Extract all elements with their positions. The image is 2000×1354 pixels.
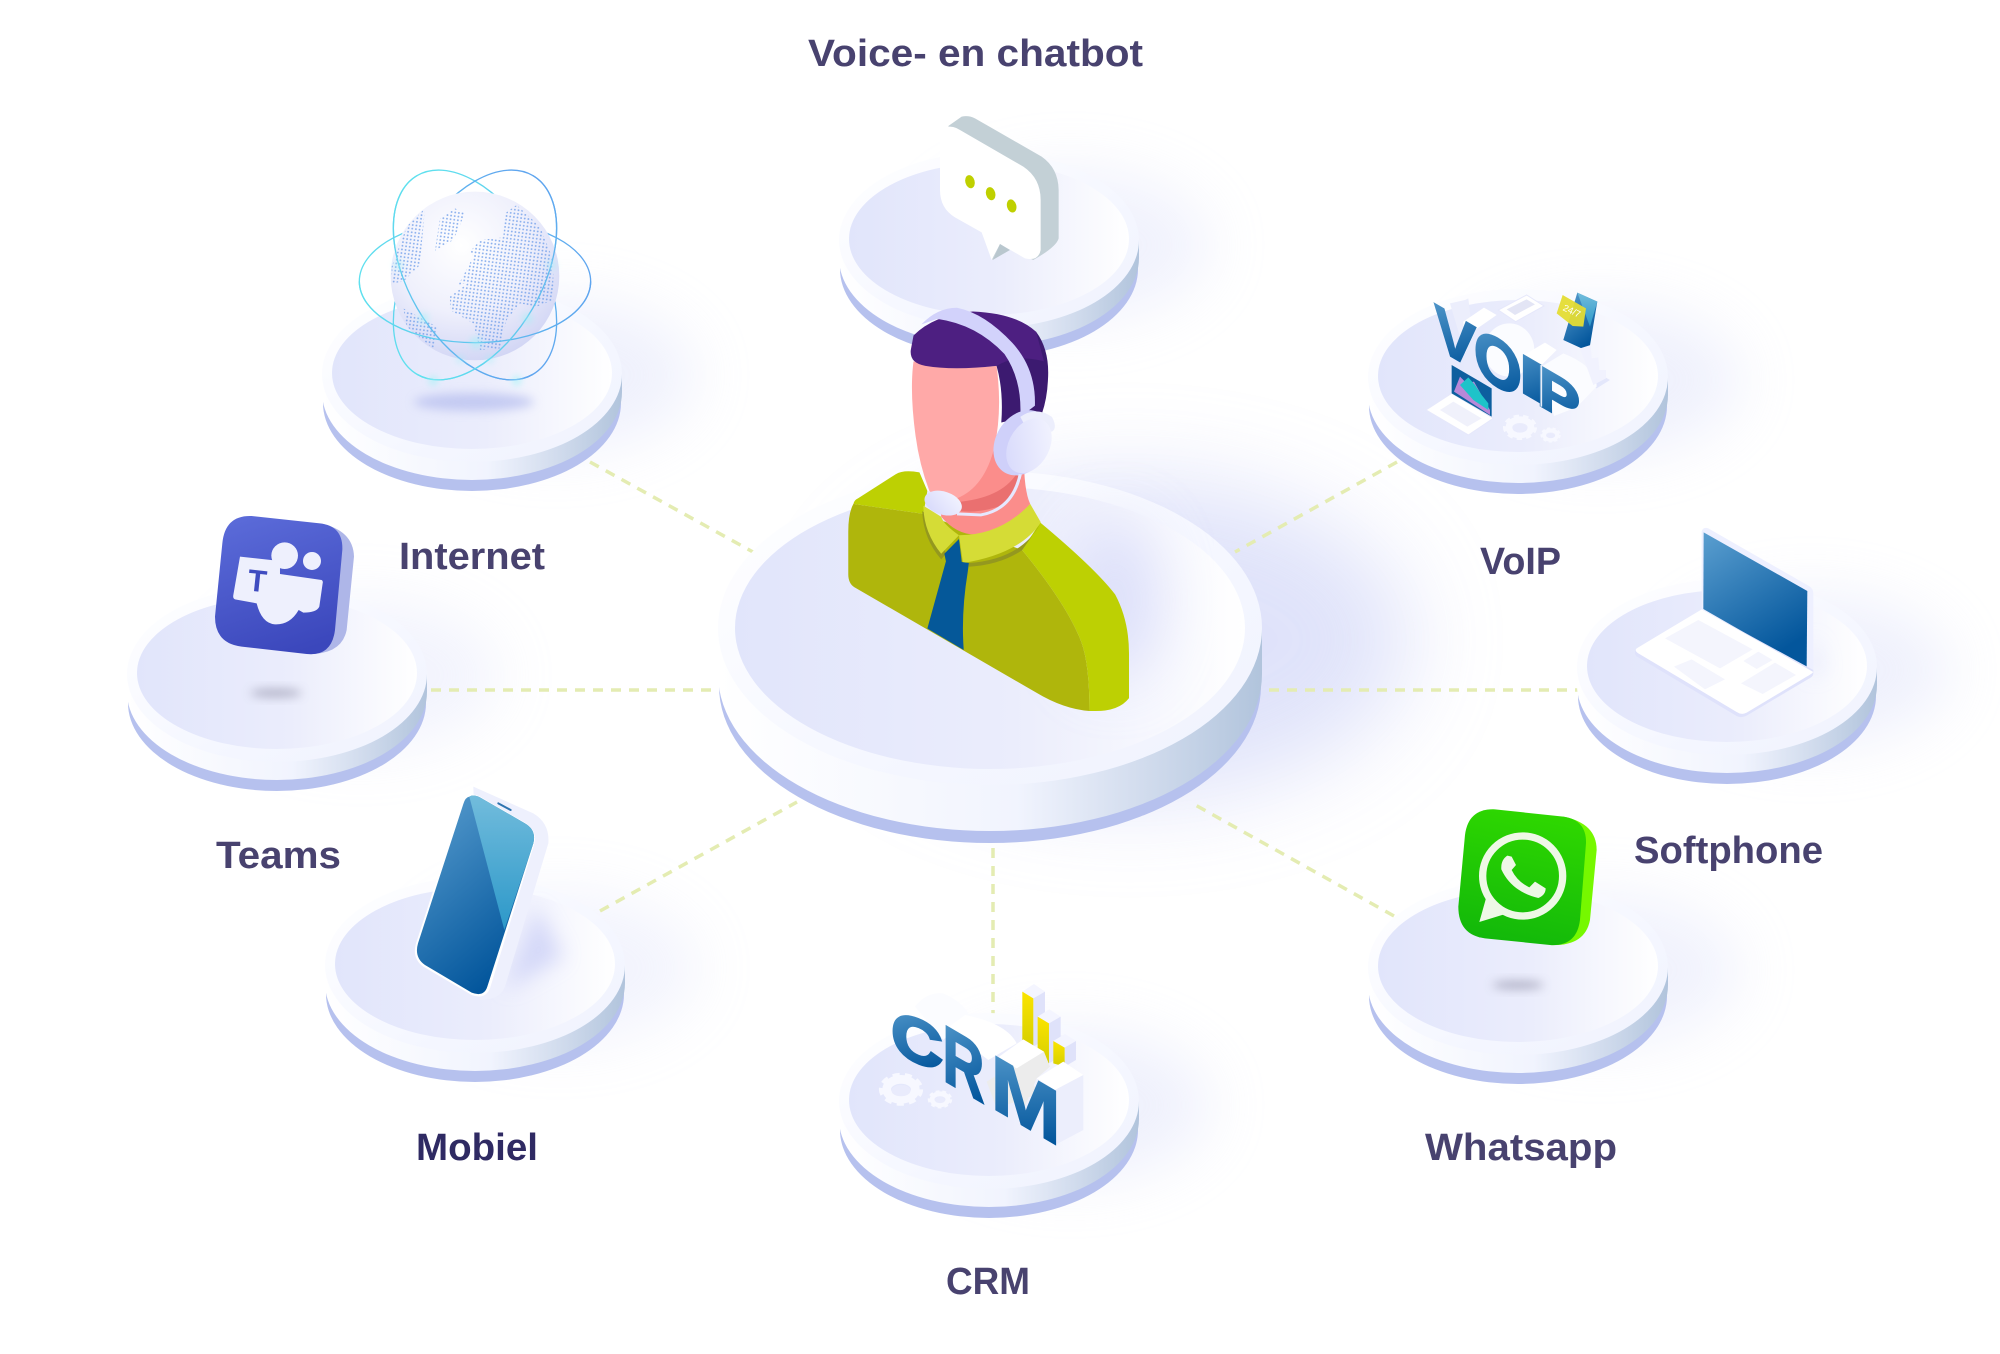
platform [325,877,625,1082]
platform [322,286,622,491]
shadow under globe [414,393,534,411]
shirt [848,471,1129,711]
label: Teams [216,835,341,877]
panel: Internet [322,142,622,578]
icon: Teams [215,516,354,654]
label: Mobiel [416,1127,538,1169]
tie [927,539,969,650]
letters: C [891,996,943,1085]
panel: VoIP [1368,289,1668,583]
icon: Whatsapp [1458,809,1597,945]
icon: VoIP scene [1426,289,1610,442]
chin shadow [957,474,1021,512]
icon: Teams: T [246,564,269,599]
shirt collar [922,504,1041,567]
panel: Softphone [1577,528,1877,872]
panel: Voice- en chatbot [808,33,1143,357]
dashed connectors [431,462,1578,1015]
label: CRM [946,1261,1030,1303]
laptop [1426,393,1493,435]
label: VoIP [1480,541,1561,583]
white extrusion backs [915,993,968,1040]
platform [1577,579,1877,784]
microphone [921,486,966,520]
white extrusion backs [1450,298,1472,353]
letters: V [1434,289,1477,385]
icon: chat bubble [940,116,1059,260]
panel: Mobiel [325,787,625,1169]
phone and 24/7 note [1563,293,1597,349]
icon: CRM scene: R [943,1007,984,1121]
panel: CRM [839,984,1139,1303]
label: Internet [399,536,545,578]
label: Whatsapp [1425,1127,1617,1169]
icon: CRM scene [881,984,1083,1164]
neck [937,435,1030,535]
microphone arm [957,474,1020,515]
panel: Teams [127,516,427,877]
icon: smartphone [415,787,563,1000]
central agent figure with headset [848,308,1129,711]
icon: VoIP scene: O [1474,311,1522,415]
icon: VoIP scene: I [1516,338,1549,421]
platform [1368,879,1668,1084]
shadow under Whatsapp icon [1492,981,1544,989]
icon: VoIP scene: 24/7 [1561,303,1582,319]
earpiece [983,401,1062,484]
platform [839,152,1139,357]
icon: globe with orbits [359,142,591,408]
face [912,361,999,499]
gears [1505,416,1535,438]
platform [1368,289,1668,494]
icon: VoIP scene: P [1537,352,1580,440]
headband [921,308,1035,417]
soft platform shadows [220,170,1950,1180]
label: Voice- en chatbot [808,33,1143,75]
shadow under Teams icon [250,689,302,697]
panel: Whatsapp [1368,809,1668,1169]
platform [127,586,427,791]
gears [881,1075,921,1104]
hair [911,311,1048,422]
calculator [1498,295,1544,322]
icon: CRM scene: M [991,1036,1061,1164]
central platform [718,471,1262,843]
label: Softphone [1634,830,1823,872]
icon: laptop [1635,528,1823,717]
platform [839,1013,1139,1218]
bar chart [1022,984,1076,1067]
